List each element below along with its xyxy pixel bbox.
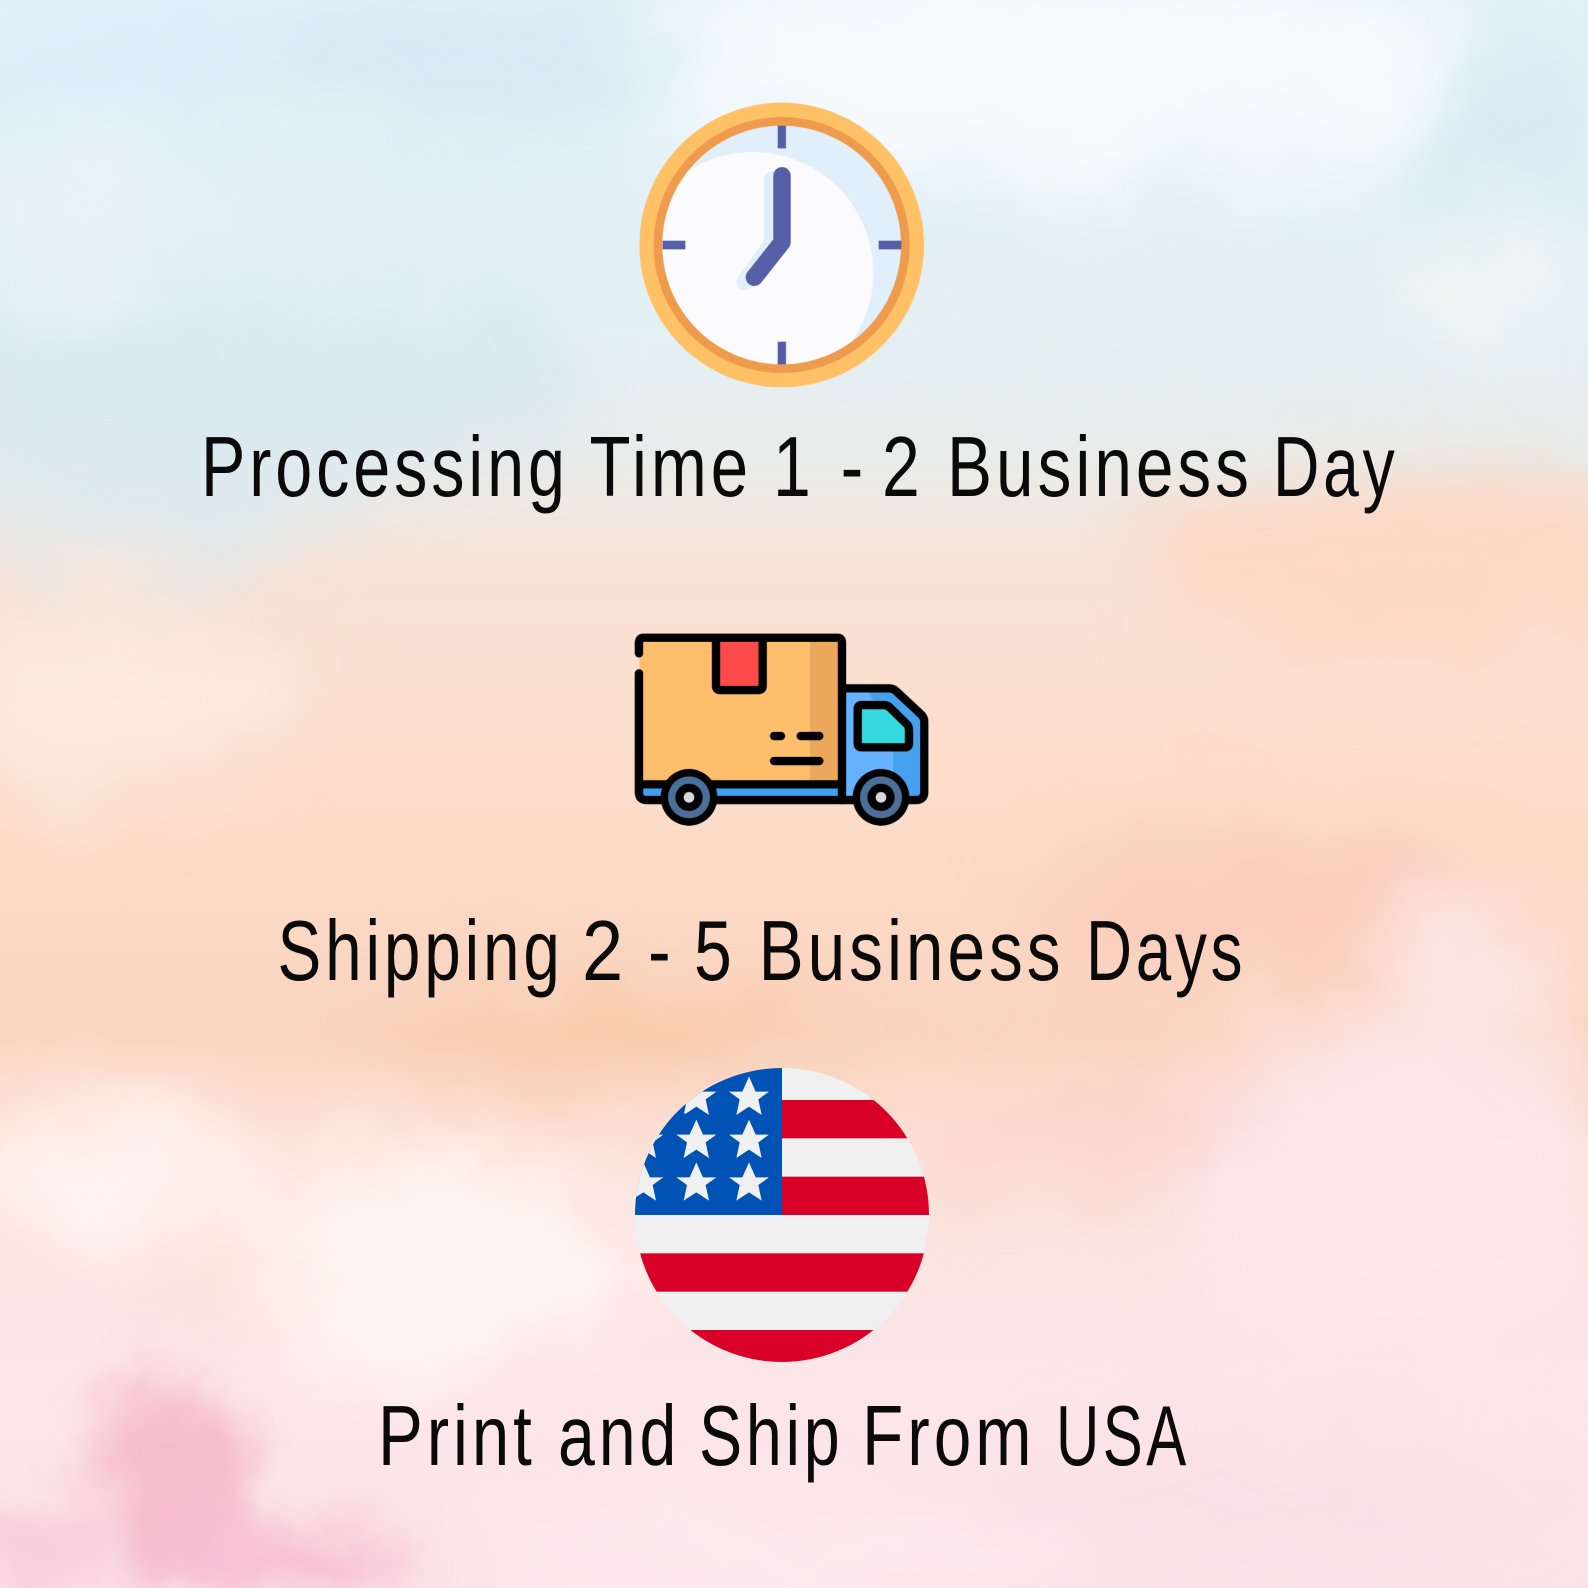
flag canton with stars xyxy=(623,1068,782,1215)
icon: US flag xyxy=(623,1068,929,1363)
text: origin: Print xyxy=(378,1390,536,1484)
text: processing time: Day xyxy=(1273,419,1398,514)
icon: clock xyxy=(632,103,924,393)
flag stripes xyxy=(635,1068,929,1363)
cab window xyxy=(858,705,909,747)
text: processing time: - xyxy=(841,420,867,515)
text: origin: Ship xyxy=(699,1388,843,1483)
truck cab xyxy=(842,688,924,800)
label dashes xyxy=(774,736,819,761)
text: shipping time: - xyxy=(648,904,675,999)
hour ticks xyxy=(663,126,901,364)
text: processing time: 1 xyxy=(773,420,815,515)
text: processing time: 2 xyxy=(882,420,924,515)
text: origin: and xyxy=(558,1389,680,1484)
text: shipping time: Days xyxy=(1086,903,1246,998)
icon: delivery truck xyxy=(639,638,924,826)
text: shipping time: Shipping xyxy=(278,904,564,999)
text: shipping time: 5 xyxy=(694,904,736,999)
clock face xyxy=(662,126,901,365)
text: processing time: Processing xyxy=(201,420,569,515)
text: shipping time: 2 xyxy=(582,903,627,998)
cargo box xyxy=(639,638,842,800)
clock rim xyxy=(639,103,924,387)
text: processing time xyxy=(201,419,1398,515)
text: processing time: Time xyxy=(590,421,752,515)
text: processing time: Business xyxy=(947,420,1253,515)
wheels xyxy=(661,769,909,826)
text: shipping time xyxy=(278,903,1246,999)
text: shipping time: Business xyxy=(759,904,1065,999)
text: origin: From xyxy=(862,1389,1036,1484)
clock hands xyxy=(745,176,782,282)
text: origin xyxy=(378,1388,1190,1484)
text: origin: USA xyxy=(1056,1388,1190,1483)
